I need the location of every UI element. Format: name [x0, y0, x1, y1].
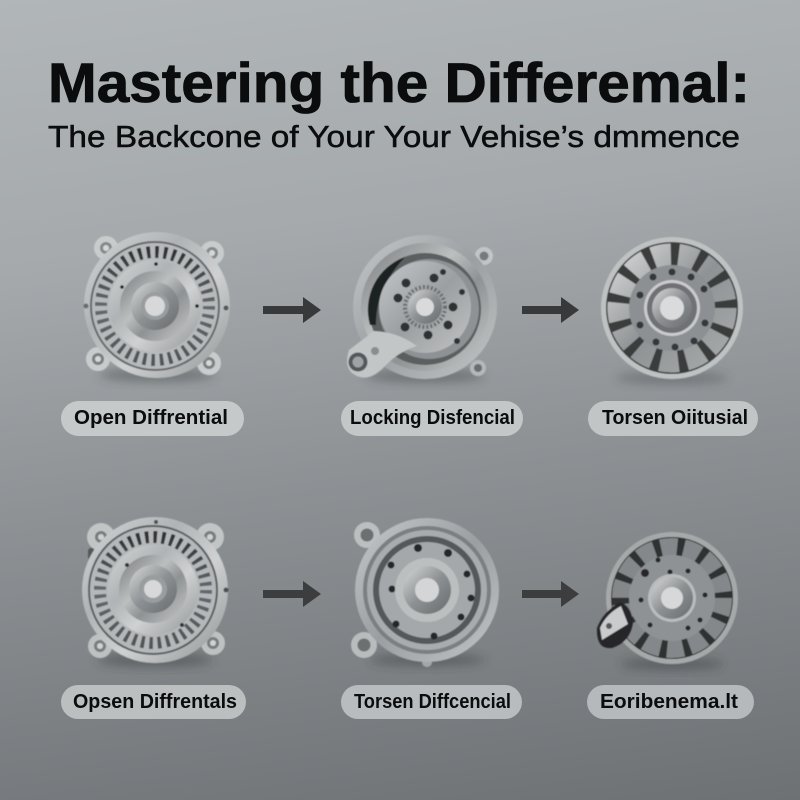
- label pill: Torsen Oiitusial: Torsen Oiitusial: [602, 407, 748, 429]
- label pill: Locking Disfencial: Locking Disfencial: [350, 407, 515, 429]
- icon: torsen differential, row 1: [601, 237, 743, 384]
- arrow 3: [263, 581, 321, 607]
- subtitle: The Backcone of Your Your Vehise’s dmmence: [48, 119, 740, 154]
- label pill: Torsen Diffcencial: Torsen Diffcencial: [354, 691, 511, 713]
- label pill: Opsen Diffrentals: Opsen Diffrentals: [73, 691, 237, 713]
- arrow 1: [263, 297, 321, 323]
- icon: locking differential, row 1: [347, 235, 497, 383]
- label pill: Locking Disfencial: [341, 401, 523, 436]
- icon: differential with arm, row 2: [597, 532, 738, 670]
- title: Mastering the Differemal:: [48, 51, 750, 114]
- arrow 2: [522, 297, 579, 323]
- arrow 4: [522, 581, 579, 607]
- label pill: Opsen Diffrentals: [61, 685, 246, 719]
- label pill: Torsen Diffcencial: [341, 685, 522, 719]
- label pill: Open Diffrential: Open Diffrential: [74, 407, 228, 429]
- label pill: Open Diffrential: [61, 401, 244, 436]
- label pill: Eoribenema.lt: [587, 685, 754, 719]
- label pill: Torsen Oiitusial: [588, 401, 758, 436]
- label pill: Eoribenema.lt: Eoribenema.lt: [600, 691, 738, 713]
- icon: open differential, row 1: [76, 232, 230, 382]
- icon: open differential, row 2: [82, 517, 228, 667]
- icon: torsen differential, row 2: [351, 518, 499, 667]
